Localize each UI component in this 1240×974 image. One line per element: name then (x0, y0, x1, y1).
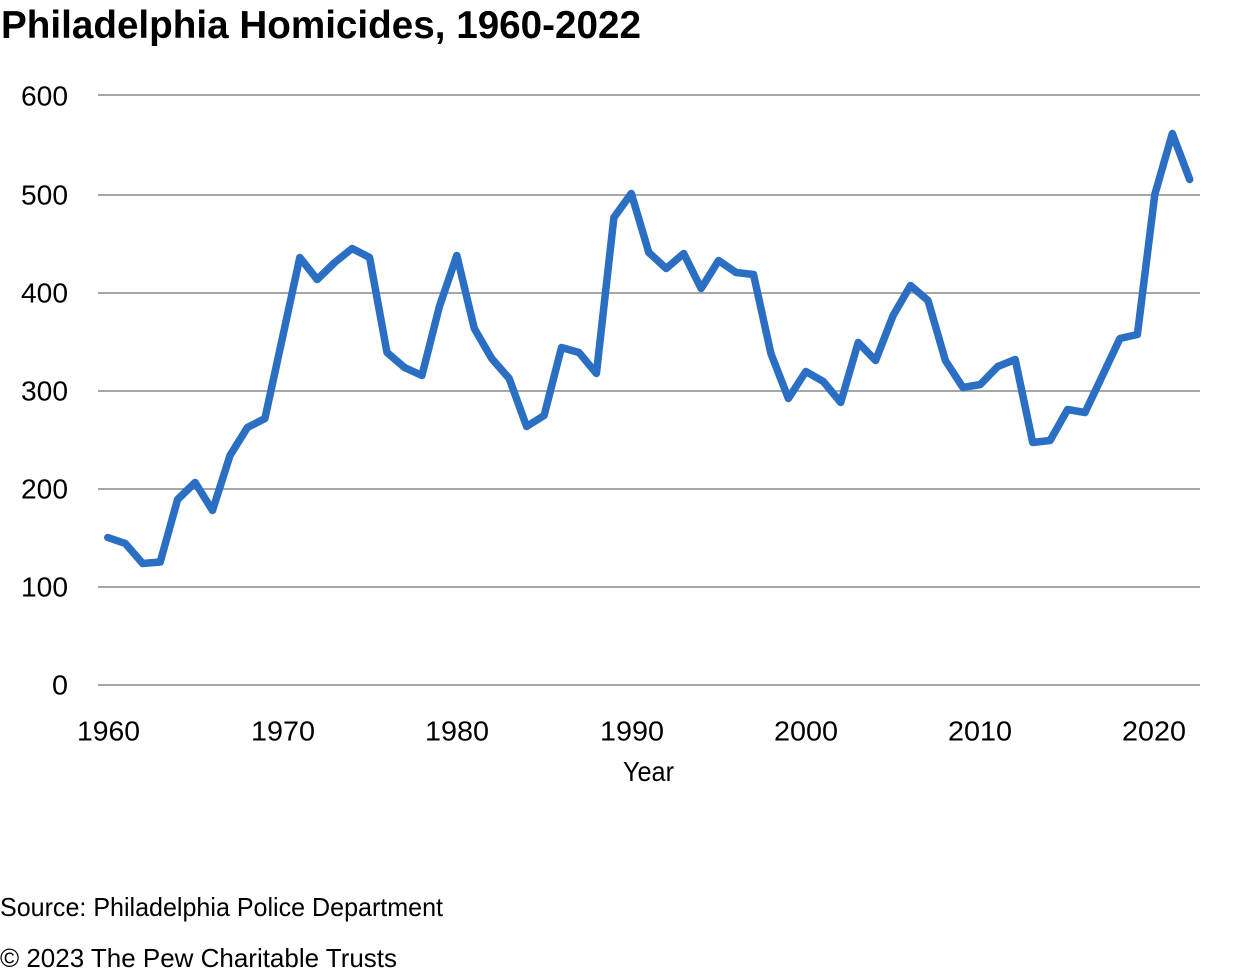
y axis labels: 200 (21, 474, 68, 504)
x axis labels: 2010 (948, 716, 1012, 746)
y axis labels: 0 (52, 670, 68, 700)
x axis labels (77, 716, 1186, 746)
y axis labels: 100 (21, 572, 68, 602)
x axis labels: 1980 (425, 716, 489, 746)
y axis labels: 500 (21, 180, 68, 210)
y axis labels: 600 (21, 80, 68, 112)
data line: homicides per year (108, 134, 1190, 564)
title: Philadelphia Homicides, 1960-2022 (1, 4, 641, 47)
x axis labels: 1970 (251, 716, 315, 746)
gridlines and x axis (98, 95, 1200, 685)
x axis labels: 2000 (774, 716, 838, 746)
x axis labels: 1990 (600, 716, 664, 746)
y axis labels: 400 (21, 278, 68, 308)
y axis labels: 300 (21, 376, 68, 406)
x axis labels: 2020 (1122, 716, 1186, 746)
y axis labels (21, 80, 68, 700)
x axis labels: 1960 (77, 716, 140, 746)
line chart (21, 80, 1200, 787)
source note: Source: Philadelphia Police Department (0, 892, 444, 922)
x axis title: Year (623, 756, 674, 787)
copyright note: © 2023 The Pew Charitable Trusts (0, 943, 397, 973)
